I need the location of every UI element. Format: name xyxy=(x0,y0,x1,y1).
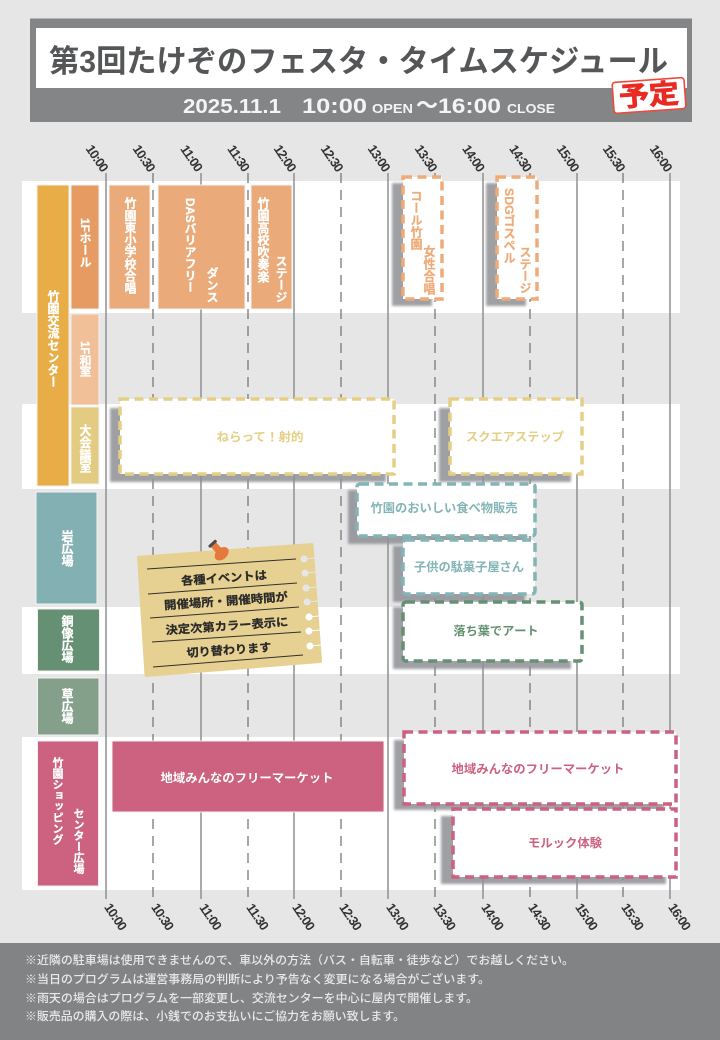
title: 第3回たけぞのフェスタ・タイムスケジュール xyxy=(49,44,668,79)
event: flea market (solid): 地域みんなのフリーマーケット xyxy=(160,770,334,785)
note text xyxy=(164,568,289,660)
event: fallen leaf art (planned) xyxy=(393,602,582,669)
event: women's chorus (planned): 女性合唱 xyxy=(422,244,436,295)
venue: grass plaza xyxy=(38,678,99,735)
date and opening hours: 16:00 xyxy=(438,95,501,118)
room: conference room: 大会議室 xyxy=(78,423,92,473)
date and opening hours: 2025.11.1 xyxy=(183,96,281,118)
event: local food sale (planned): 竹園のおいしい食べ物販売 xyxy=(370,500,518,515)
note text: 開催場所・開催時間が xyxy=(164,590,289,612)
bottom time axis labels: 14:00 xyxy=(478,900,507,933)
top time axis labels: 10:30 xyxy=(130,142,159,175)
top time axis labels: 11:30 xyxy=(224,142,253,174)
room: conference room xyxy=(71,407,99,484)
note text: 決定次第カラー表示に xyxy=(165,615,289,637)
top time axis labels: 15:00 xyxy=(554,142,583,175)
event: high school band stage xyxy=(251,185,292,309)
footer notes panel xyxy=(0,943,720,1040)
footer notes panel: ※当日のプログラムは運営事務局の判断により予告なく変更になる場合がございます。 xyxy=(25,972,490,986)
bottom time axis labels xyxy=(101,900,694,933)
footer notes panel: ※雨天の場合はプログラムを一部変更し、交流センターを中心に屋内で開催します。 xyxy=(25,991,478,1005)
date and opening hours xyxy=(183,93,555,118)
room: 1F Japanese room: 1F和室 xyxy=(78,341,92,377)
top time axis labels: 15:30 xyxy=(600,142,629,175)
room: 1F hall xyxy=(71,185,99,309)
venue: statue plaza: 銅像広場 xyxy=(60,614,74,664)
bottom time axis labels: 12:30 xyxy=(336,900,365,933)
top time axis labels: 11:00 xyxy=(177,142,206,174)
bottom time axis labels: 13:00 xyxy=(383,900,412,933)
event: local food sale (planned) xyxy=(348,484,535,544)
bottom time axis labels: 10:30 xyxy=(148,900,177,933)
event: square step (planned) xyxy=(439,399,582,482)
top time axis labels: 14:30 xyxy=(506,142,535,175)
venue: community center xyxy=(37,185,69,486)
event: high school band stage: ステージ xyxy=(274,255,288,303)
date and opening hours: 〜 xyxy=(416,93,438,118)
footer notes panel: ※近隣の駐車場は使用できませんので、車以外の方法（バス・自転車・徒歩など）でお越しください。 xyxy=(25,953,574,967)
icon: push pin xyxy=(206,537,231,563)
date and opening hours: OPEN xyxy=(372,101,413,116)
footer notes panel: ※販売品の購入の際は、小銭でのお支払いにご協力をお願い致します。 xyxy=(25,1009,405,1023)
room: 1F hall: 1Fホール xyxy=(78,218,92,268)
note ruled lines xyxy=(147,559,303,667)
top time axis labels xyxy=(83,142,676,175)
top time axis labels: 16:00 xyxy=(647,142,676,175)
top time axis labels: 10:00 xyxy=(83,142,112,175)
bottom time axis labels: 14:30 xyxy=(525,900,554,933)
event: DAS barrier-free dance: DASバリアフリー xyxy=(183,198,197,293)
bottom time axis labels: 15:00 xyxy=(572,900,601,933)
stamp: scheduled: 予定 xyxy=(618,78,680,113)
event: high school band stage: 竹園高校吹奏楽 xyxy=(256,196,270,284)
date and opening hours: CLOSE xyxy=(507,101,555,116)
event: flea market (solid) xyxy=(112,741,384,812)
bottom time axis labels: 11:00 xyxy=(196,901,225,933)
event: molkky experience (planned) xyxy=(441,809,676,884)
venue: shopping center plaza: 竹園ショッピング xyxy=(51,756,64,845)
venue: statue plaza xyxy=(38,609,100,671)
event: kids' candy shop (planned): 子供の駄菓子屋さん xyxy=(414,559,524,574)
event: DAS barrier-free dance: ダンス xyxy=(205,266,219,303)
top time axis labels: 14:00 xyxy=(459,142,488,175)
event: flea market (planned) xyxy=(394,732,676,810)
event: elementary school chorus xyxy=(109,185,150,309)
event: SDG gospel stage (planned) xyxy=(486,177,537,306)
venue: rock plaza xyxy=(36,492,97,604)
bottom time axis labels: 10:00 xyxy=(101,900,130,933)
event: molkky experience (planned): モルック体験 xyxy=(528,835,602,850)
bottom time axis labels: 11:30 xyxy=(243,901,272,933)
event: elementary school chorus: 竹園東小学校合唱 xyxy=(123,196,137,294)
event: women's chorus (planned) xyxy=(392,177,442,306)
top time axis labels: 13:00 xyxy=(365,142,394,175)
bottom time axis labels: 16:00 xyxy=(665,900,694,933)
event: square step (planned): スクエアステップ xyxy=(466,430,564,444)
note text: 各種イベントは xyxy=(181,568,268,588)
venue: community center: 竹園交流センター xyxy=(46,289,60,388)
venue: grass plaza: 草広場 xyxy=(60,687,74,725)
bottom time axis labels: 15:30 xyxy=(618,900,647,933)
event: SDG gospel stage (planned): SDGゴスペル xyxy=(502,188,516,264)
event: women's chorus (planned): コール竹園 xyxy=(409,190,423,250)
room: 1F Japanese room xyxy=(71,314,99,405)
time grid lines xyxy=(106,173,670,899)
sticky note callout xyxy=(137,537,322,677)
white row bands xyxy=(22,181,680,890)
event: archery game (planned): ねらって！射的 xyxy=(216,429,304,444)
venue: shopping center plaza xyxy=(38,741,98,886)
event: archery game (planned) xyxy=(110,399,394,482)
bottom time axis labels: 13:30 xyxy=(430,900,459,933)
bottom time axis labels: 12:00 xyxy=(289,900,318,933)
note binder holes xyxy=(301,556,321,649)
top time axis labels: 13:30 xyxy=(412,142,441,175)
event: fallen leaf art (planned): 落ち葉でアート xyxy=(454,623,538,638)
venue: shopping center plaza: センター広場 xyxy=(72,808,84,875)
top time axis labels: 12:30 xyxy=(318,142,347,175)
note text: 切り替わります xyxy=(186,640,272,660)
event: DAS barrier-free dance xyxy=(158,185,245,309)
header panel xyxy=(30,18,692,122)
event: SDG gospel stage (planned): ステージ xyxy=(518,246,532,294)
top time axis labels: 12:00 xyxy=(271,142,300,175)
date and opening hours: 10:00 xyxy=(302,95,367,118)
event: flea market (planned): 地域みんなのフリーマーケット xyxy=(452,761,624,776)
event: kids' candy shop (planned) xyxy=(393,540,535,602)
venue: rock plaza: 岩広場 xyxy=(60,529,74,568)
